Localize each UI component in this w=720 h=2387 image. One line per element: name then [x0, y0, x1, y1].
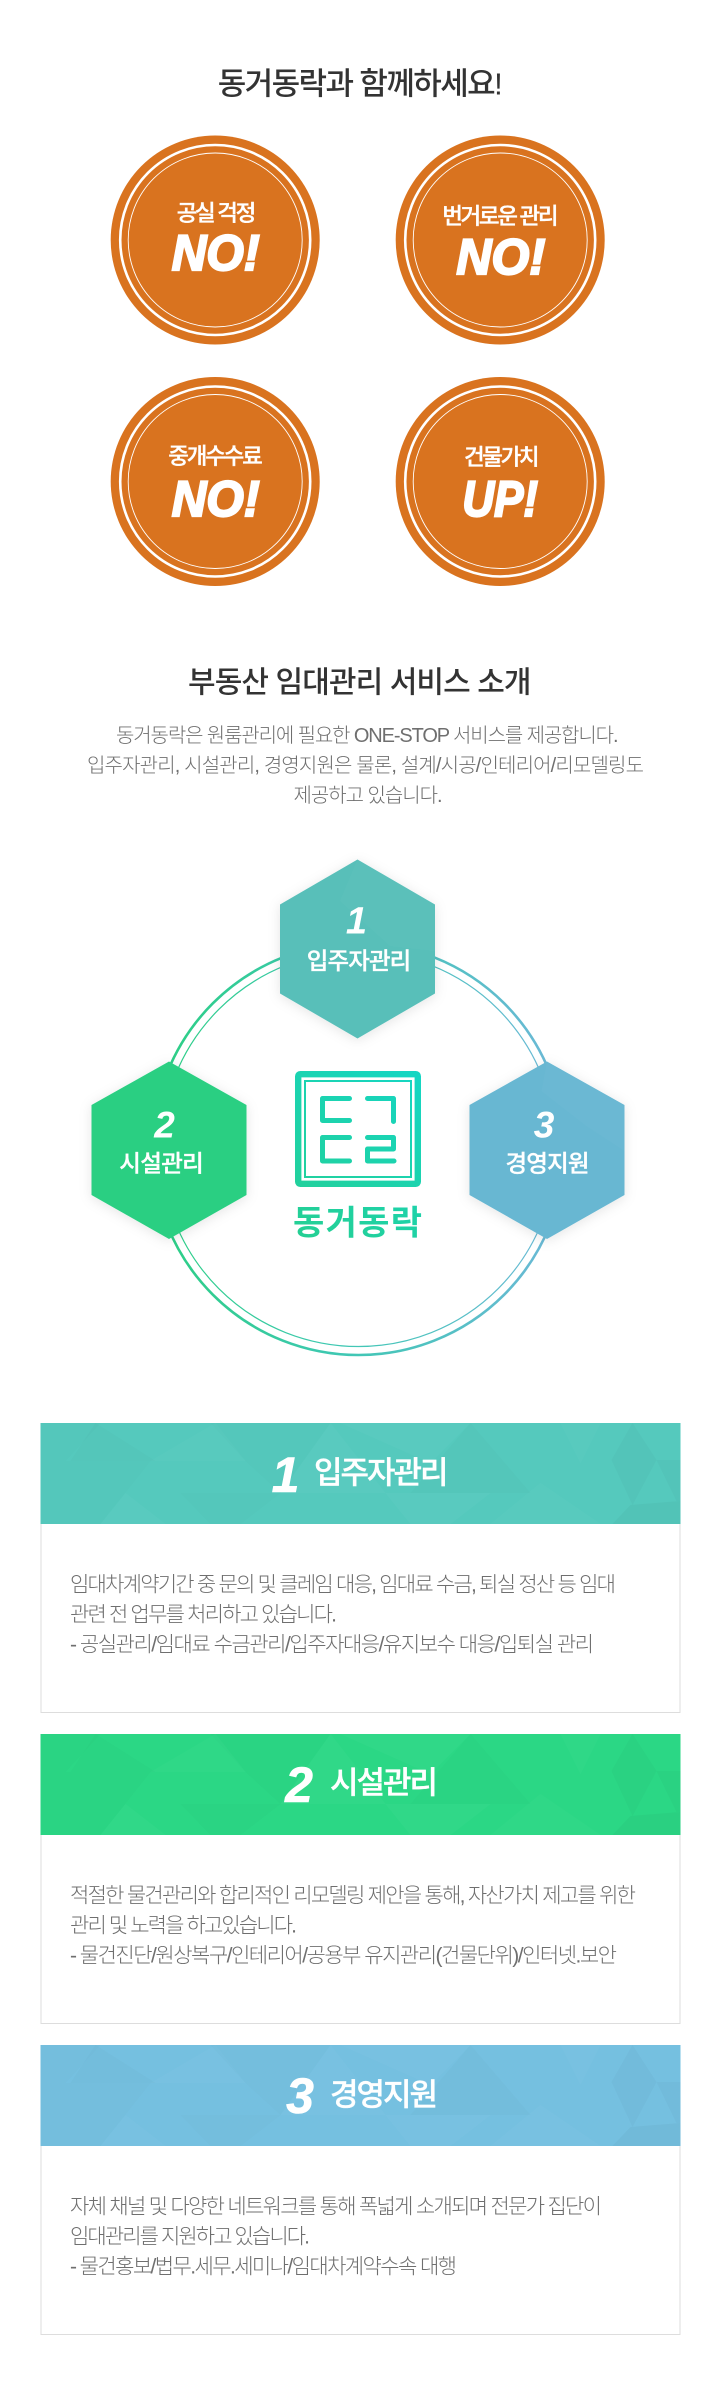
intro text — [87, 724, 644, 807]
badge: 공실 걱정 NO! — [111, 136, 320, 344]
panel 3 header: 3 — [286, 2068, 314, 2124]
badge label: 건물가치 — [464, 445, 540, 470]
panel 2 text — [70, 1884, 636, 1968]
ring — [152, 943, 564, 1355]
section heading: 부동산 임대관리 서비스 소개 — [188, 666, 532, 700]
hexagon 3 경영지원 — [470, 1062, 624, 1239]
panel 3 header: 경영지원 — [330, 2078, 438, 2112]
panel 1 header: 입주자관리 — [314, 1456, 448, 1490]
panel 3 text: 임대관리를 지원하고 있습니다. — [70, 2226, 310, 2248]
hexagon 2 시설관리: 시설관리 — [119, 1150, 204, 1176]
hexagon 1 입주자관리: 1 — [346, 900, 367, 942]
panel 2 header: 2 — [284, 1757, 313, 1813]
intro text: 제공하고 있습니다. — [294, 784, 442, 807]
panel 2: 시설관리 — [40, 1734, 680, 2024]
badge label: 번거로운 관리 — [442, 204, 559, 229]
badge word: NO! — [172, 471, 260, 527]
badge label: 공실 걱정 — [177, 201, 256, 226]
panel 3 text: - 물건홍보/법무.세무.세미나/임대차계약수속 대행 — [70, 2256, 457, 2278]
hexagon 1 입주자관리 — [280, 860, 435, 1038]
badge: 건물가치 UP! — [396, 377, 605, 586]
badge: 번거로운 관리 NO! — [396, 136, 605, 344]
logo — [293, 1074, 422, 1242]
badge word: NO! — [456, 229, 545, 285]
panel 1 text: 관련 전 업무를 처리하고 있습니다. — [70, 1604, 337, 1626]
panel 2 text: - 물건진단/원상복구/인테리어/공용부 유지관리(건물단위)/인터넷.보안 — [70, 1944, 617, 1968]
panel 1 text — [70, 1574, 616, 1656]
panel 1 header — [40, 1423, 680, 1524]
panel 1 text: 임대차계약기간 중 문의 및 클레임 대응, 임대료 수금, 퇴실 정산 등 임대 — [70, 1574, 616, 1596]
hexagon 2 시설관리: 2 — [153, 1104, 175, 1146]
hexagon 1 입주자관리: 입주자관리 — [307, 948, 411, 974]
title: 동거동락과 함께하세요! — [218, 67, 503, 102]
panel 2 header: 시설관리 — [330, 1766, 438, 1800]
logo wordmark: 동거동락 — [293, 1204, 422, 1242]
panel 2 header — [40, 1734, 680, 1835]
panel 3 text: 자체 채널 및 다양한 네트워크를 통해 폭넓게 소개되며 전문가 집단이 — [70, 2196, 602, 2218]
panel 3: 경영지원 — [40, 2045, 680, 2334]
panel 2 text: 적절한 물건관리와 합리적인 리모델링 제안을 통해, 자산가치 제고를 위한 — [70, 1884, 636, 1908]
panel 1: 입주자관리 — [40, 1423, 680, 1712]
badge: 중개수수료 NO! — [111, 377, 320, 586]
panel 1 header: 1 — [272, 1447, 299, 1503]
panel 3 header — [40, 2045, 680, 2146]
panel 3 text — [70, 2196, 602, 2278]
badge word: UP! — [462, 471, 538, 527]
hexagon 3 경영지원: 3 — [534, 1104, 555, 1146]
badge label: 중개수수료 — [168, 444, 263, 469]
badge word: NO! — [172, 225, 260, 281]
panel 1 text: - 공실관리/임대료 수금관리/입주자대응/유지보수 대응/입퇴실 관리 — [70, 1634, 594, 1656]
intro text: 입주자관리, 시설관리, 경영지원은 물론, 설계/시공/인테리어/리모델링도 — [87, 754, 644, 777]
hexagon 2 시설관리 — [92, 1062, 246, 1239]
diagram: service cycle — [92, 860, 624, 1355]
hexagon 3 경영지원: 경영지원 — [506, 1150, 590, 1176]
panel 2 text: 관리 및 노력을 하고있습니다. — [70, 1914, 297, 1938]
intro text: 동거동락은 원룸관리에 필요한 ONE-STOP 서비스를 제공합니다. — [116, 724, 618, 747]
